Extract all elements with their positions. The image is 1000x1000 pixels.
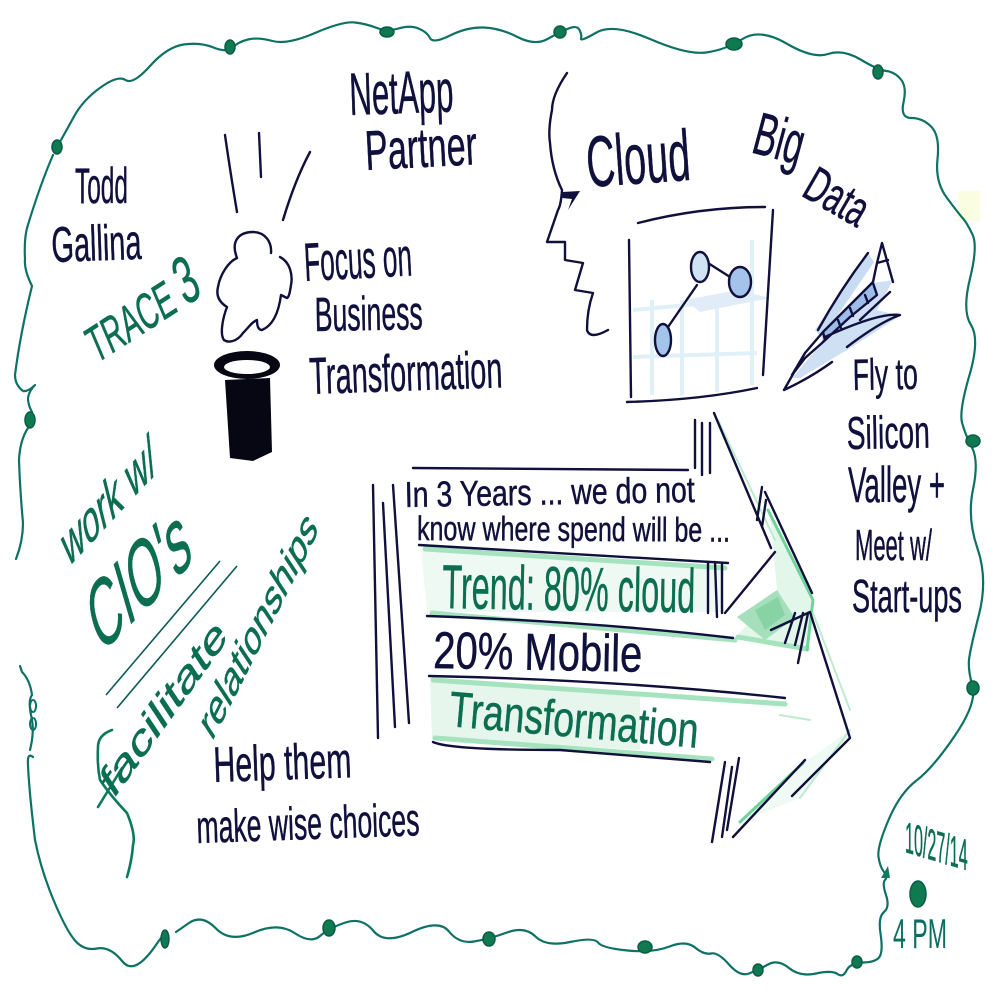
heading: NetApp Partner: Partner xyxy=(363,113,478,182)
arrow text: Trend 80% cloud: Trend: 80% cloud xyxy=(442,553,696,626)
big arrow with text xyxy=(373,413,850,842)
icon: cloud xyxy=(217,232,292,342)
date and time xyxy=(893,813,968,957)
text: Help them make wise choices xyxy=(196,732,420,853)
label: Big Data: Big xyxy=(747,100,812,177)
text: Focus on Business Transformation xyxy=(302,227,503,406)
text: Fly to Silicon Valley + Meet w/ Start-ups xyxy=(846,350,962,622)
arrow text: In 3 Years: know where spend will be ... xyxy=(417,510,730,550)
label: Big Data: Data xyxy=(794,156,880,238)
company: TRACE 3: TRACE 3 xyxy=(73,240,209,377)
name: Todd Gallina: Gallina xyxy=(50,214,142,273)
icon: black top hat xyxy=(214,351,280,461)
label: Big Data xyxy=(747,100,880,238)
text: relationships: relationships xyxy=(193,501,324,749)
emphasis lines xyxy=(225,133,310,220)
face profile xyxy=(547,73,608,335)
arrow text: Transformation: Transformation xyxy=(447,681,701,759)
name: Todd Gallina xyxy=(50,158,142,273)
text: facilitate: facilitate xyxy=(94,609,234,808)
arrow text: 20% Mobile: 20% Mobile xyxy=(433,622,643,684)
text: Fly to Silicon Valley + Meet w/ Start-ups: Silicon xyxy=(846,406,930,459)
sticky note remnant xyxy=(958,191,980,221)
heading: NetApp Partner xyxy=(348,57,478,182)
heading: NetApp Partner: NetApp xyxy=(348,57,454,128)
double underline xyxy=(106,561,237,708)
arrow text: In 3 Years xyxy=(404,469,730,550)
text: work w/: work w/ xyxy=(55,421,162,580)
arrow text: In 3 Years: In 3 Years ... we do not xyxy=(404,469,695,515)
text: Focus on Business Transformation: Transformation xyxy=(308,341,503,406)
text: Focus on Business Transformation: Focus on xyxy=(302,227,413,293)
text: Help them make wise choices: make wise choices xyxy=(196,793,420,853)
icon: paper airplane xyxy=(784,243,900,390)
text: Fly to Silicon Valley + Meet w/ Start-ups: Fly to xyxy=(852,350,918,400)
text: Help them make wise choices: Help them xyxy=(212,732,352,793)
text: Focus on Business Transformation: Business xyxy=(314,287,423,342)
text: facilitate xyxy=(94,609,234,877)
date and time: 4 PM xyxy=(893,910,947,957)
text: CIO's: CIO's xyxy=(77,482,200,673)
arrow outline xyxy=(373,413,850,842)
chart: line chart on board xyxy=(627,207,773,402)
name: Todd Gallina: Todd xyxy=(75,158,128,214)
icon: eye xyxy=(562,191,580,210)
label: Cloud: Cloud xyxy=(584,116,693,203)
arrow green marker fill xyxy=(421,420,850,822)
